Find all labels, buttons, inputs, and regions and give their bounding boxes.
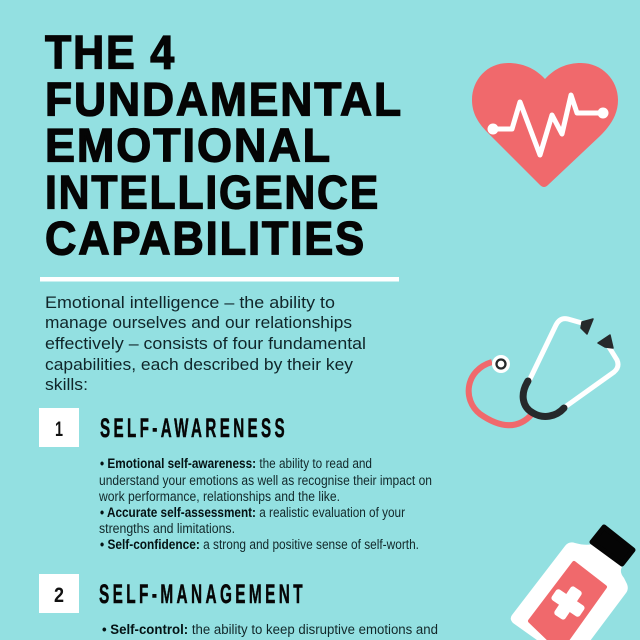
- icon: heart with ECG line: [472, 63, 618, 187]
- intro text: manage ourselves and our relationships: [45, 314, 352, 332]
- icon: medicine bottle: [511, 527, 633, 640]
- skills list 1: work performance, relationships and the like.: [98, 489, 340, 504]
- title: [45, 26, 403, 266]
- intro text: capabilities, each described by their key: [45, 356, 354, 374]
- skills list 1: • Self-confidence: a strong and positive sense of self-worth.: [100, 537, 419, 552]
- intro text: effectively – consists of four fundamental: [45, 335, 366, 353]
- icon: stethoscope: [469, 319, 618, 425]
- intro text: [45, 294, 366, 394]
- skills list 1: • Emotional self-awareness: the ability to read and: [100, 456, 372, 471]
- section 1: self-awareness: [39, 408, 432, 552]
- skills list 1: [98, 456, 432, 552]
- section 2: self-management: [39, 574, 438, 637]
- skills list 2: • Self-control: the ability to keep disruptive emotions and: [102, 622, 438, 637]
- title: EMOTIONAL: [45, 120, 332, 172]
- title: FUNDAMENTAL: [45, 74, 403, 126]
- skills list 1: strengths and limitations.: [99, 521, 235, 536]
- number badge 1: [39, 408, 79, 447]
- heading: self-management: SELF-MANAGEMENT: [99, 579, 306, 609]
- title: THE 4: [45, 26, 176, 80]
- skills list 1: understand your emotions as well as recognise their impact on: [99, 473, 432, 488]
- intro text: skills:: [45, 376, 88, 394]
- heading: self-awareness: SELF-AWARENESS: [100, 413, 288, 443]
- skills list 1: • Accurate self-assessment: a realistic evaluation of your: [100, 505, 405, 520]
- title: INTELLIGENCE: [45, 166, 380, 220]
- intro text: Emotional intelligence – the ability to: [45, 294, 335, 312]
- number badge 2: 2: [54, 584, 64, 607]
- number badge 2: [39, 574, 79, 613]
- title: CAPABILITIES: [45, 212, 366, 266]
- number badge 1: 1: [55, 418, 63, 441]
